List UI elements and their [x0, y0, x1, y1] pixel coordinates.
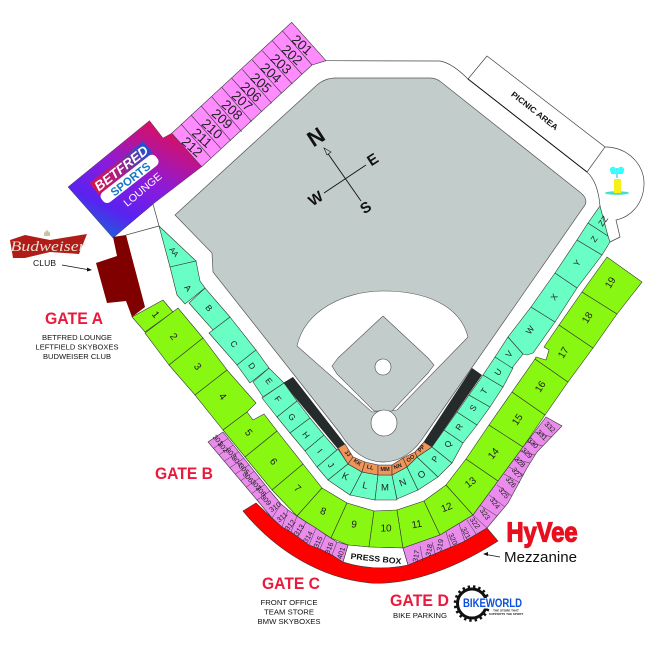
bike world logo: [455, 586, 524, 620]
playing field: [175, 78, 586, 462]
gate a: BETFRED LOUNGE: [42, 333, 112, 342]
bike world logo: THE STORE THAT: [493, 608, 519, 612]
mint section labels: H: [300, 430, 312, 440]
lime section labels: 9: [350, 519, 358, 531]
pink sections 301-316 and 401: [208, 432, 348, 562]
mint section labels: P: [429, 454, 441, 464]
pink section labels right: 330: [526, 436, 540, 450]
pink section labels right: 328: [513, 455, 527, 469]
bike world logo: SUPPORTS THE SPORT: [489, 612, 523, 616]
mint section labels: Q: [442, 438, 454, 450]
press box: PRESS BOX: [350, 552, 402, 566]
mint section labels: ZZ: [596, 214, 610, 228]
pink section labels left: 305: [237, 462, 251, 476]
mint section labels: K: [340, 471, 351, 484]
orange section labels: JJ: [343, 450, 351, 458]
hy-vee logo: HyVee: [506, 516, 578, 548]
pink section labels right: 331: [535, 428, 549, 442]
mint section labels: Z: [588, 234, 600, 244]
mint section labels: D: [246, 361, 258, 371]
gate d: [390, 592, 449, 620]
pink section labels left: 307: [249, 478, 263, 492]
lime section labels: 17: [556, 345, 572, 361]
gate c: [258, 575, 321, 626]
gate a: BUDWEISER CLUB: [43, 352, 111, 361]
icon: fountain: [605, 167, 629, 195]
upper pink section labels: 211: [189, 125, 215, 151]
pink section labels left: 315: [311, 535, 325, 549]
pink section labels right: 318: [424, 543, 434, 557]
upper pink section labels: 203: [268, 51, 294, 77]
mint section labels: S: [467, 403, 479, 413]
dugout bars: [283, 368, 482, 449]
budweiser club block: [96, 235, 145, 317]
pink section labels right: 332: [543, 420, 557, 434]
pink section labels right: 320: [446, 532, 460, 546]
gate d: GATE D: [390, 592, 449, 610]
pink section labels left: 314: [301, 530, 315, 544]
pink section labels left: 308: [254, 484, 268, 498]
gate a: LEFTFIELD SKYBOXES: [36, 342, 119, 352]
pink section labels left: 312: [283, 518, 297, 532]
upper pink section labels: 207: [229, 88, 255, 114]
club label and arrow: CLUB: [33, 258, 56, 268]
upper pink section labels: 210: [199, 116, 225, 142]
pink section labels right: 323: [478, 507, 492, 521]
mint section labels: L: [361, 480, 369, 492]
mezzanine red band: [243, 503, 498, 583]
pink section labels right: [411, 420, 557, 563]
pink section labels right: 319: [435, 538, 445, 552]
pink section labels left: [211, 433, 347, 560]
lime section labels: 1: [149, 309, 161, 321]
betfred logo band: BETFRED: [91, 143, 151, 194]
compass: [303, 122, 382, 218]
lime section labels: 5: [242, 427, 254, 439]
compass: W: [305, 188, 327, 210]
pink section labels right: 325: [497, 486, 511, 500]
lime section labels: 12: [440, 501, 455, 515]
mint section labels: [167, 214, 610, 494]
pink section labels left: 310: [268, 500, 282, 514]
pink section labels right: 324: [488, 496, 502, 510]
mint section labels: O: [416, 468, 428, 482]
mint section labels: J: [326, 460, 336, 470]
pink section labels right: 329: [520, 446, 534, 460]
upper pink section labels: [179, 32, 315, 160]
mint section labels: U: [492, 367, 504, 377]
lime section labels: 14: [486, 446, 502, 462]
lime section labels: 18: [580, 310, 596, 326]
pink section labels left: 316: [323, 541, 335, 555]
compass: S: [357, 198, 375, 218]
upper pink section labels: 202: [279, 42, 305, 68]
lime section labels: 11: [411, 519, 423, 531]
lime section labels: 10: [380, 524, 392, 534]
picnic area: PICNIC AREA: [509, 90, 560, 132]
mezzanine label and arrow: Mezzanine: [504, 549, 577, 566]
field grass: [175, 78, 586, 462]
mint section labels: B: [203, 303, 215, 314]
orange section labels: PP: [417, 444, 427, 454]
press box: [343, 545, 408, 568]
gate b: GATE B: [155, 465, 213, 483]
upper pink section labels: 208: [219, 97, 245, 123]
pink section labels left: 304: [230, 454, 244, 468]
pink section labels left: 303: [224, 446, 238, 460]
pitcher mound: [375, 359, 391, 375]
mint section labels: F: [272, 394, 284, 404]
pink section labels left: 309: [259, 493, 273, 507]
upper pink section labels: 204: [258, 60, 285, 86]
pink section labels right: 326: [504, 475, 518, 489]
orange section labels: KK: [352, 458, 362, 468]
upper pink section labels: 201: [289, 32, 315, 58]
pink section labels right: 321: [459, 526, 473, 540]
betfred sports lounge: [68, 121, 202, 238]
upper pink section labels: 205: [248, 70, 274, 96]
pink section labels right: 317: [411, 549, 421, 563]
pink sections 317-332: [403, 417, 562, 565]
lime section labels: 19: [603, 275, 619, 291]
infield arc: [297, 291, 468, 412]
lime seating sections: [132, 257, 642, 548]
orange section labels: OO: [406, 454, 417, 464]
pink section labels right: 322: [468, 516, 482, 530]
pink section labels left: 401: [335, 546, 347, 560]
infield diamond: [332, 316, 434, 411]
compass: E: [364, 150, 382, 170]
pink section labels left: 301: [211, 433, 225, 447]
mint section labels: M: [381, 482, 389, 494]
budweiser logo: [10, 230, 87, 258]
mint seating sections: [159, 206, 610, 500]
picnic area: [468, 56, 605, 172]
gate c: BMW SKYBOXES: [258, 617, 321, 626]
pink section labels left: 306: [241, 470, 255, 484]
lime section labels: 3: [191, 361, 203, 373]
budweiser logo: Budweiser: [10, 239, 86, 255]
orange section labels: LL: [366, 464, 375, 472]
home plate circle: [371, 410, 397, 436]
mint section labels: V: [503, 349, 515, 359]
mint section labels: R: [453, 422, 465, 432]
mint section labels: E: [263, 376, 275, 387]
orange section labels: NN: [393, 463, 403, 471]
perimeter lines: [113, 61, 600, 237]
pink sections 201-212: [172, 22, 326, 167]
lime section labels: 2: [167, 331, 179, 343]
lime section labels: 7: [291, 483, 303, 495]
upper pink section labels: 212: [179, 134, 205, 160]
lime section labels: 6: [267, 456, 279, 468]
lime section labels: 4: [216, 391, 228, 403]
mint section labels: T: [478, 386, 490, 396]
mint section labels: N: [398, 477, 408, 489]
gate c: GATE C: [262, 575, 320, 593]
orange section labels: [343, 444, 427, 473]
gate a: [36, 310, 119, 361]
mint section labels: C: [228, 339, 240, 349]
mint section labels: A: [182, 283, 194, 294]
sports logo band: SPORTS: [109, 161, 153, 199]
gate a: GATE A: [45, 310, 103, 328]
mint section labels: I: [315, 447, 325, 455]
mint section labels: Y: [571, 258, 583, 268]
fountain area: [605, 147, 644, 242]
bike world logo: BIKEWORLD: [463, 598, 522, 610]
lime section labels: 8: [319, 506, 328, 518]
orange section labels: MM: [380, 467, 390, 473]
mint section labels: AA: [167, 245, 181, 259]
compass: N: [303, 122, 329, 152]
lime section labels: 15: [510, 412, 526, 428]
lime section labels: 13: [463, 475, 479, 491]
gate c: TEAM STORE: [264, 608, 314, 616]
orange seating sections: [338, 442, 432, 475]
lime section labels: 16: [533, 379, 549, 395]
pink section labels right: 327: [510, 466, 524, 480]
upper pink section labels: 209: [209, 106, 235, 132]
mint section labels: G: [286, 411, 298, 423]
mint section labels: X: [548, 292, 560, 302]
pink section labels left: 311: [275, 510, 289, 524]
upper pink section labels: 206: [238, 79, 264, 105]
pink section labels left: 302: [216, 440, 230, 454]
betfred sports lounge: LOUNGE: [122, 171, 164, 209]
gate c: FRONT OFFICE: [260, 598, 318, 607]
lime section labels: [149, 275, 619, 534]
pink section labels left: 313: [292, 523, 306, 537]
club label and arrow: [33, 258, 92, 272]
mint section labels: W: [524, 324, 536, 336]
gate d: BIKE PARKING: [393, 611, 447, 620]
